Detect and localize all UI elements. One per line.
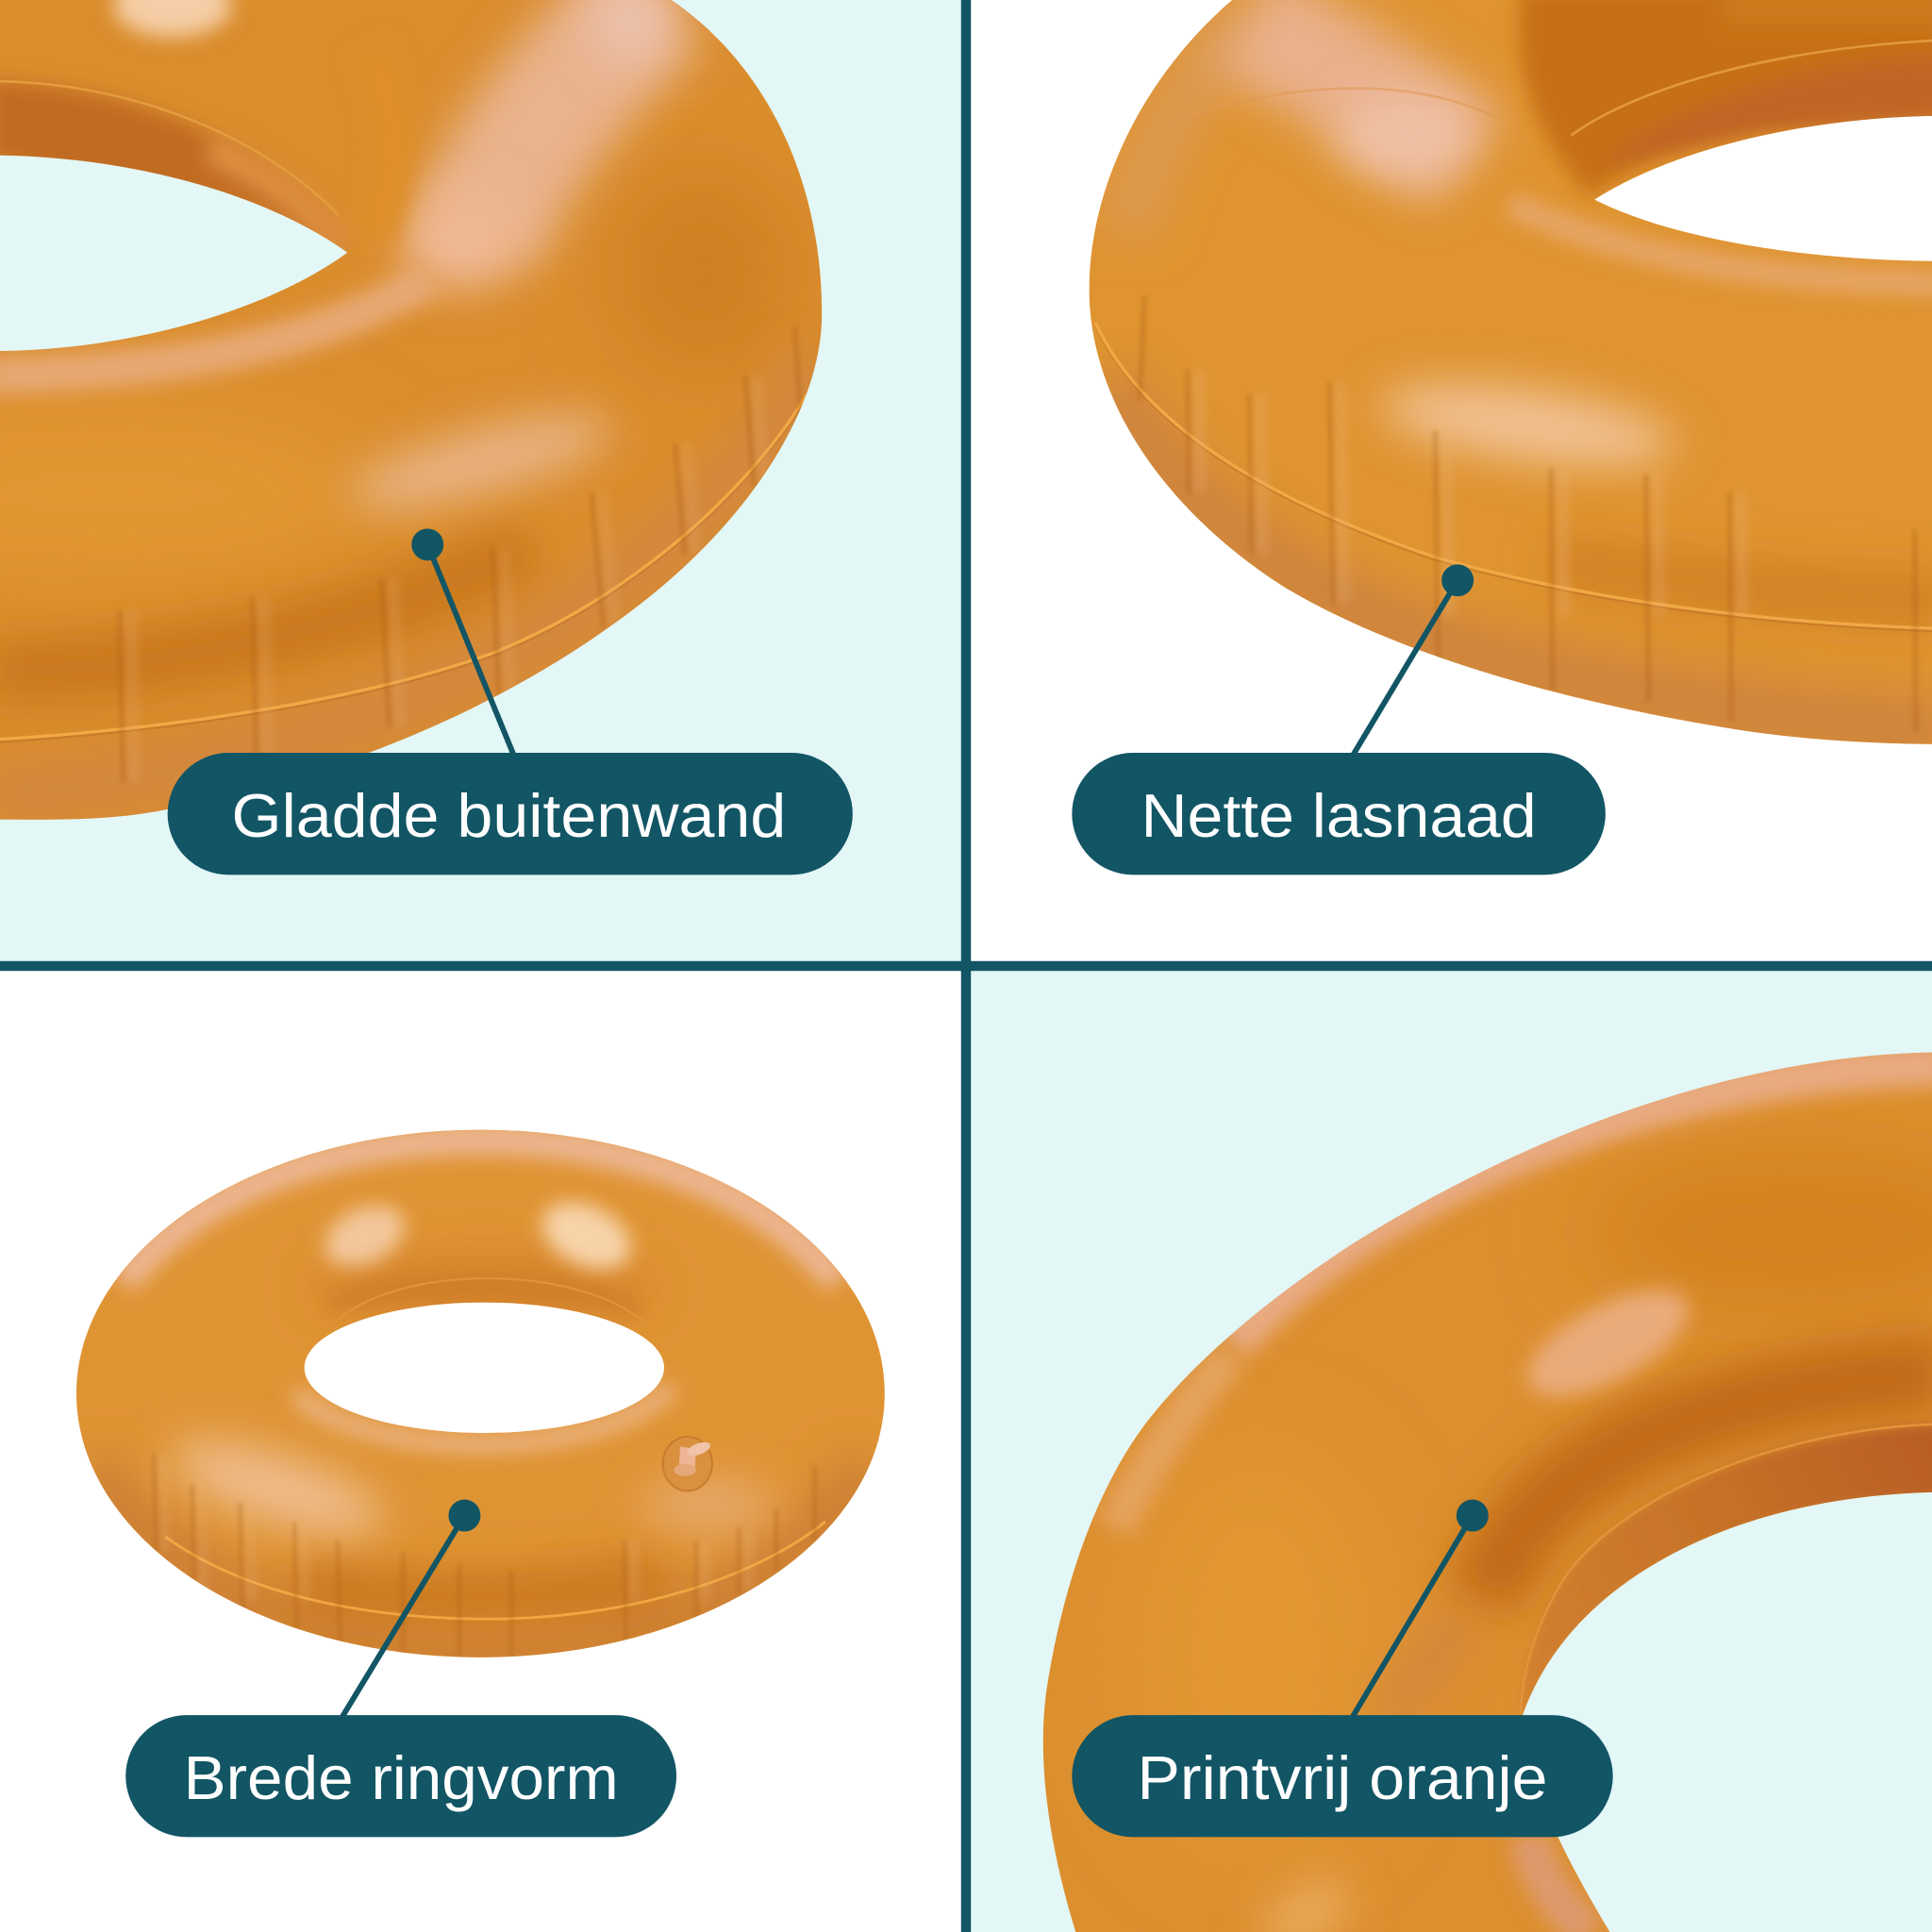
callout: Gladde buitenwand: Gladde buitenwand (232, 781, 786, 850)
callout: Nette lasnaad: Nette lasnaad (1141, 781, 1537, 850)
callout: Brede ringvorm: Brede ringvorm (184, 1743, 619, 1812)
icon: air valve (663, 1437, 712, 1491)
ring: close-up of colour (1029, 1041, 1932, 1932)
panel: wide ring shape (76, 1130, 885, 1657)
callout: Brede ringvorm (125, 1500, 676, 1837)
callout: Printvrij oranje: Printvrij oranje (1138, 1743, 1547, 1812)
callout: Printvrij oranje (1072, 1500, 1613, 1837)
wrinkles (1140, 295, 1916, 733)
seam (165, 1522, 825, 1619)
ring: whole product (61, 1115, 899, 1670)
seam (1095, 323, 1932, 631)
callout: Gladde buitenwand (168, 528, 853, 874)
panel: print-free orange (966, 966, 1932, 1932)
callout: Nette lasnaad (1072, 564, 1606, 874)
panel: smooth outer wall (0, 0, 966, 966)
ring: close-up of outer wall (0, 0, 850, 838)
seam (0, 394, 808, 741)
wrinkles (120, 326, 801, 782)
ring: close-up of weld seam (1072, 0, 1932, 764)
wrinkles (154, 1454, 814, 1657)
panel: neat weld seam (1089, 0, 1932, 744)
